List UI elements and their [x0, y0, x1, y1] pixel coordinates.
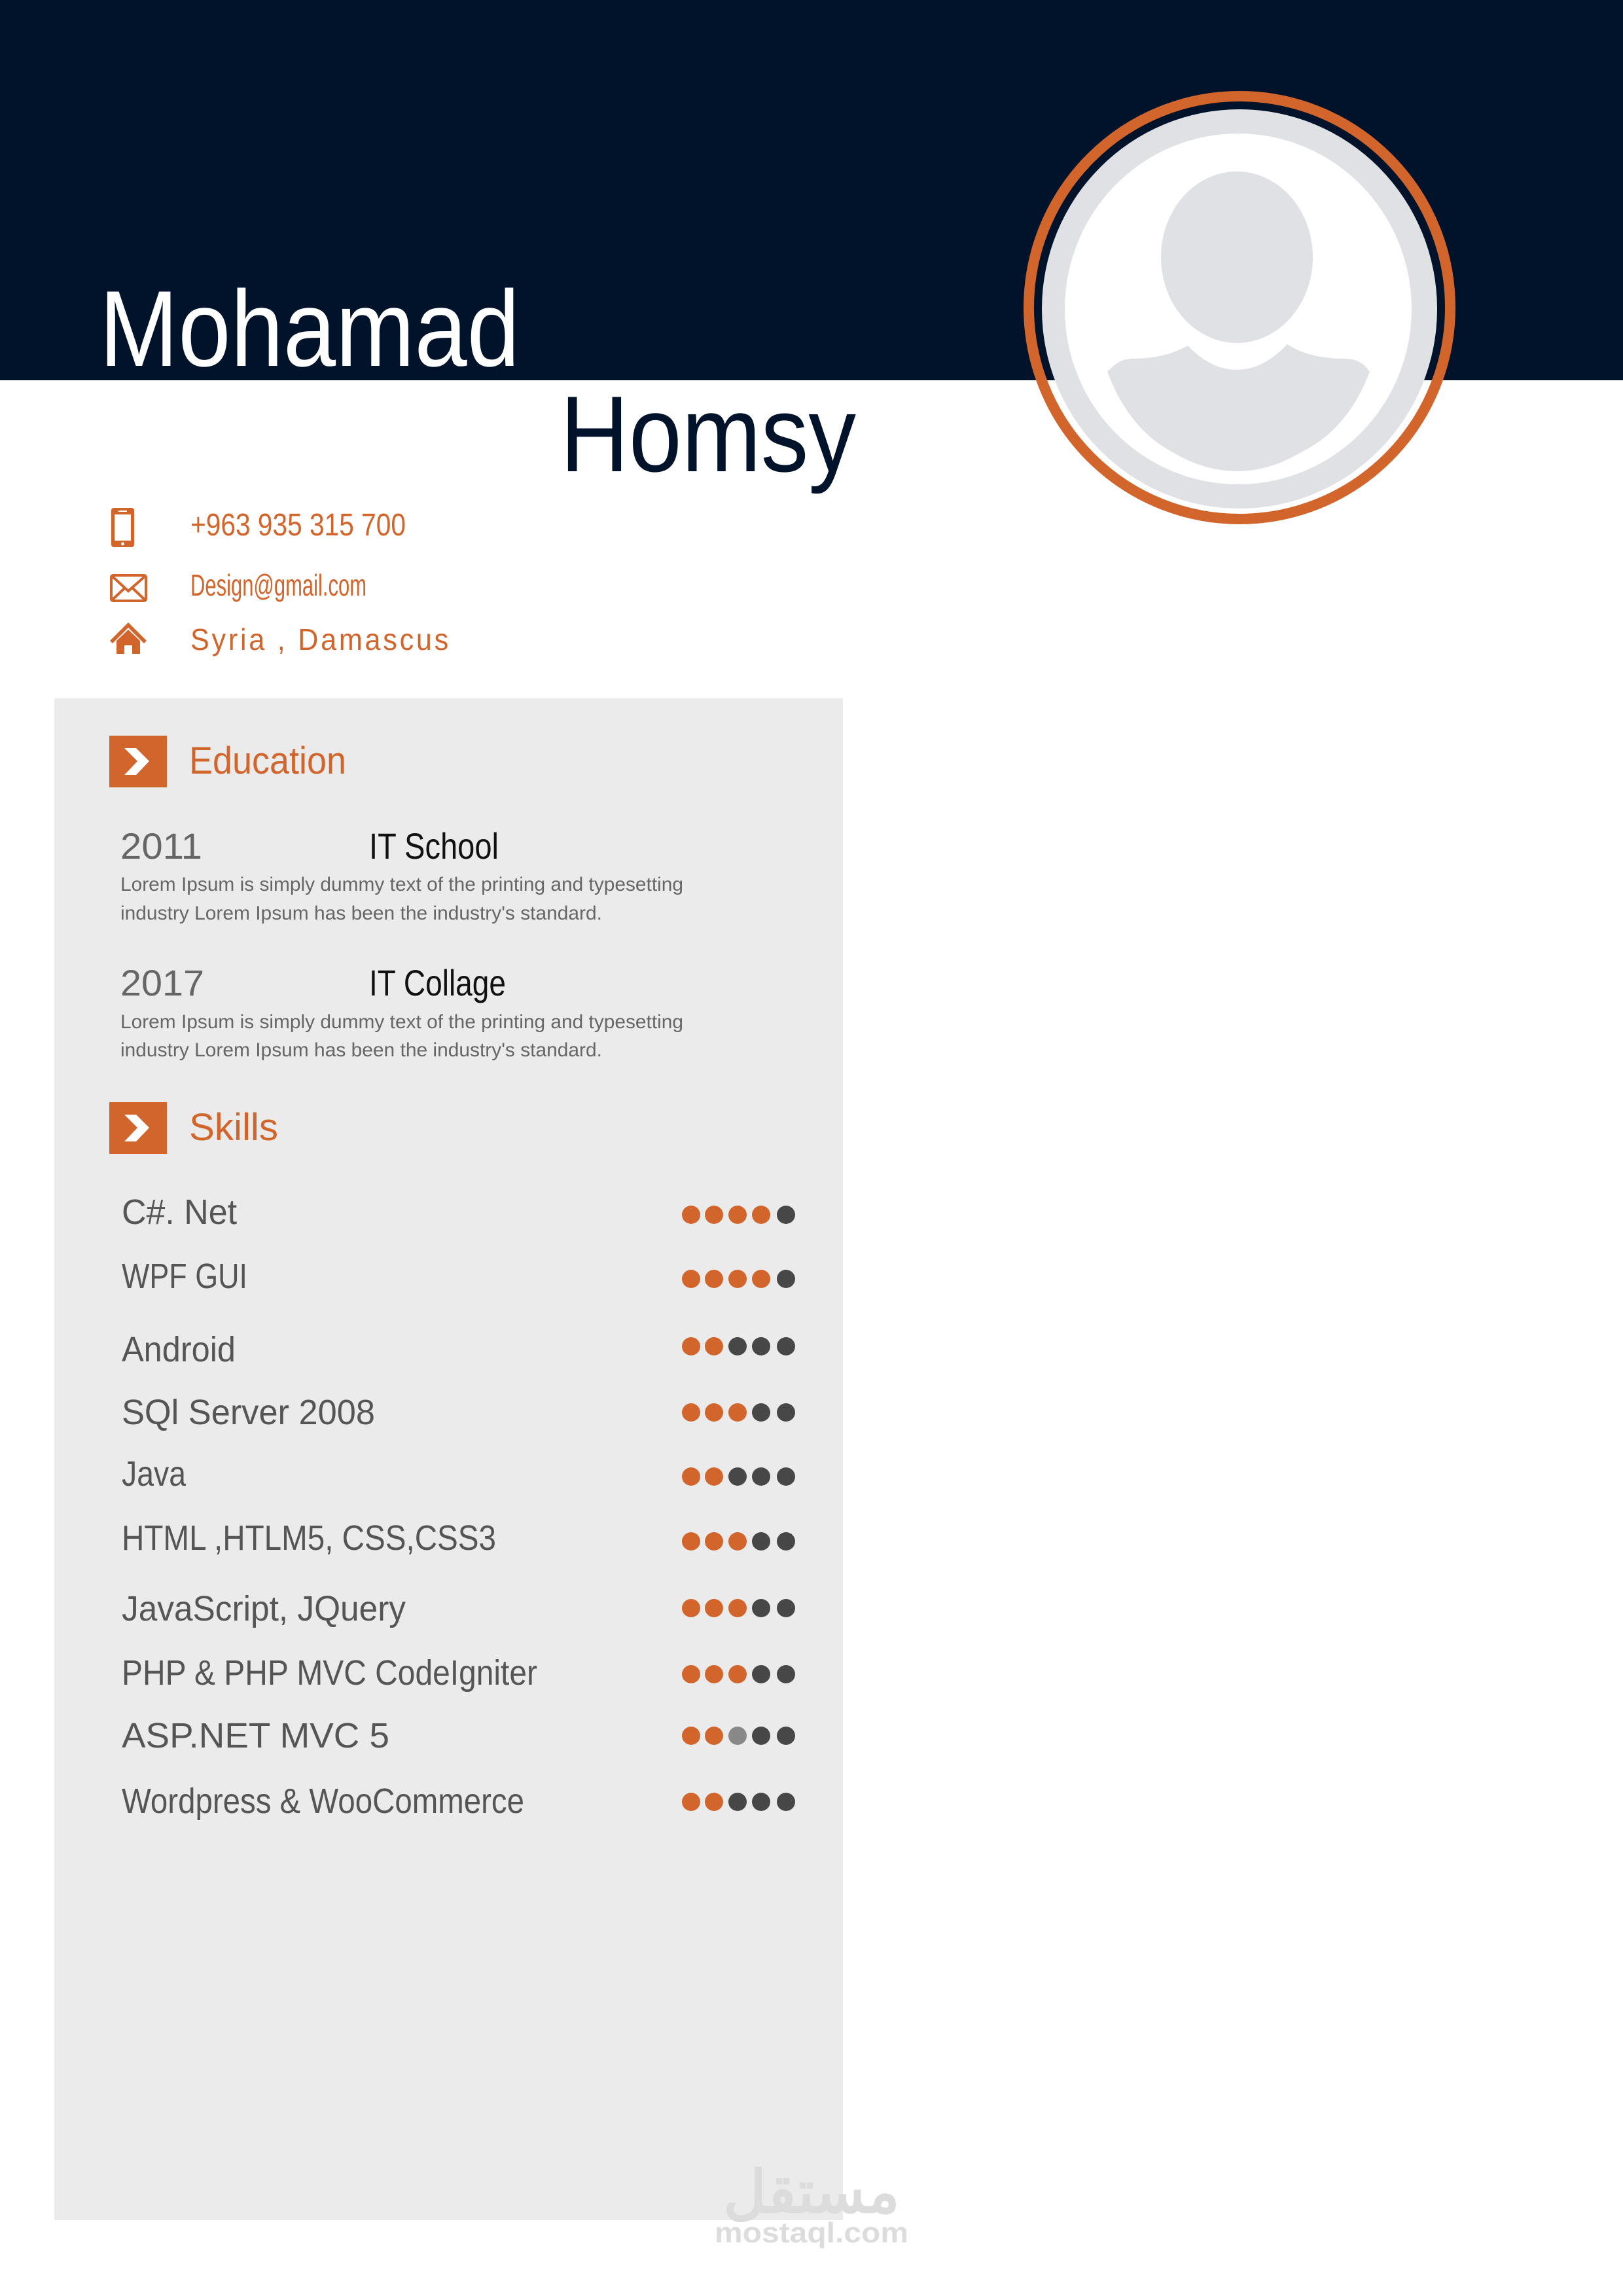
- education entry 2017: industry Lorem Ipsum has been the industry's standard.: [120, 1039, 602, 1061]
- name: Mohamad: Mohamad: [99, 268, 520, 389]
- education entry 2017: Lorem Ipsum is simply dummy text of the printing and typesetting: [120, 1011, 683, 1033]
- skills list: SQl Server 2008: [122, 1393, 375, 1432]
- panel: sidebar: [54, 698, 843, 2220]
- icon: person head: [1161, 171, 1313, 343]
- watermark: مستقل: [723, 2160, 900, 2225]
- education entry 2017: 2017: [120, 962, 204, 1003]
- contact: phone: +963 935 315 700: [190, 508, 406, 543]
- education entry 2017: [120, 962, 683, 1061]
- education entry 2017: IT Collage: [369, 962, 506, 1003]
- icon: home: [110, 622, 147, 654]
- skills list: WPF GUI: [122, 1257, 247, 1296]
- skills list: Java: [122, 1454, 187, 1494]
- skills list: HTML ,HTLM5, CSS,CSS3: [122, 1518, 496, 1558]
- heading: Skills: Skills: [189, 1106, 278, 1149]
- icon: phone: [111, 508, 134, 547]
- skills list: PHP & PHP MVC CodeIgniter: [122, 1653, 537, 1693]
- heading: Skills: [109, 1102, 278, 1154]
- contact: email: Design@gmail.com: [190, 568, 366, 602]
- education entry 2011: [120, 825, 683, 924]
- profile photo placeholder: [1029, 96, 1450, 519]
- skills list: Wordpress & WooCommerce: [122, 1782, 524, 1821]
- header band: [0, 0, 1623, 380]
- watermark: mostaql.com: [715, 2217, 908, 2249]
- education entry 2011: industry Lorem Ipsum has been the industry's standard.: [120, 903, 602, 924]
- education entry 2011: Lorem Ipsum is simply dummy text of the printing and typesetting: [120, 874, 683, 895]
- heading: Education: [109, 736, 346, 787]
- icon: envelope: [111, 575, 146, 601]
- heading: Education: Education: [189, 740, 346, 782]
- skills list: [122, 1193, 537, 1821]
- name: Homsy: Homsy: [560, 374, 856, 494]
- skills list: C#. Net: [122, 1193, 237, 1232]
- contact: address: Syria , Damascus: [190, 622, 451, 656]
- education entry 2011: IT School: [369, 825, 499, 867]
- skill rating dots: [682, 1206, 795, 1811]
- contact: email: [111, 568, 366, 602]
- contact: phone: [111, 508, 406, 547]
- skills list: JavaScript, JQuery: [122, 1589, 406, 1628]
- skills list: ASP.NET MVC 5: [122, 1716, 389, 1755]
- watermark: [715, 2160, 908, 2249]
- education entry 2011: 2011: [120, 825, 202, 867]
- skills list: Android: [122, 1330, 236, 1369]
- icon: person body: [1107, 344, 1370, 471]
